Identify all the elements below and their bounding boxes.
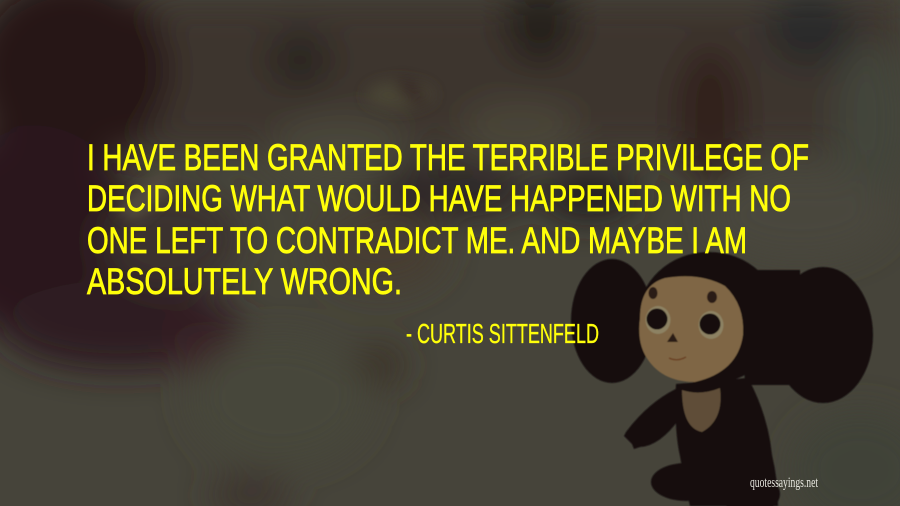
left foot bbox=[651, 463, 721, 501]
mouth bbox=[669, 357, 686, 360]
illustration: Cheburashka toy character bbox=[571, 252, 873, 506]
left ear bbox=[571, 259, 653, 383]
face bbox=[639, 276, 743, 382]
right ear bbox=[773, 267, 873, 403]
left brow dot bbox=[648, 287, 658, 299]
body bbox=[676, 378, 778, 506]
quote line 4: ABSOLUTELY WRONG. bbox=[87, 261, 402, 302]
ear joint bbox=[740, 270, 800, 385]
arm bbox=[624, 386, 682, 449]
quote text bbox=[87, 137, 809, 302]
watermark: quotessayings.net bbox=[750, 475, 819, 491]
right brow dot bbox=[707, 291, 717, 303]
head hood bbox=[638, 252, 780, 384]
attribution: - CURTIS SITTENFELD bbox=[406, 318, 599, 349]
right eye bbox=[698, 311, 724, 339]
nose bbox=[667, 333, 678, 342]
right foot bbox=[720, 474, 780, 506]
belly bbox=[682, 388, 721, 432]
left eye bbox=[646, 306, 670, 334]
